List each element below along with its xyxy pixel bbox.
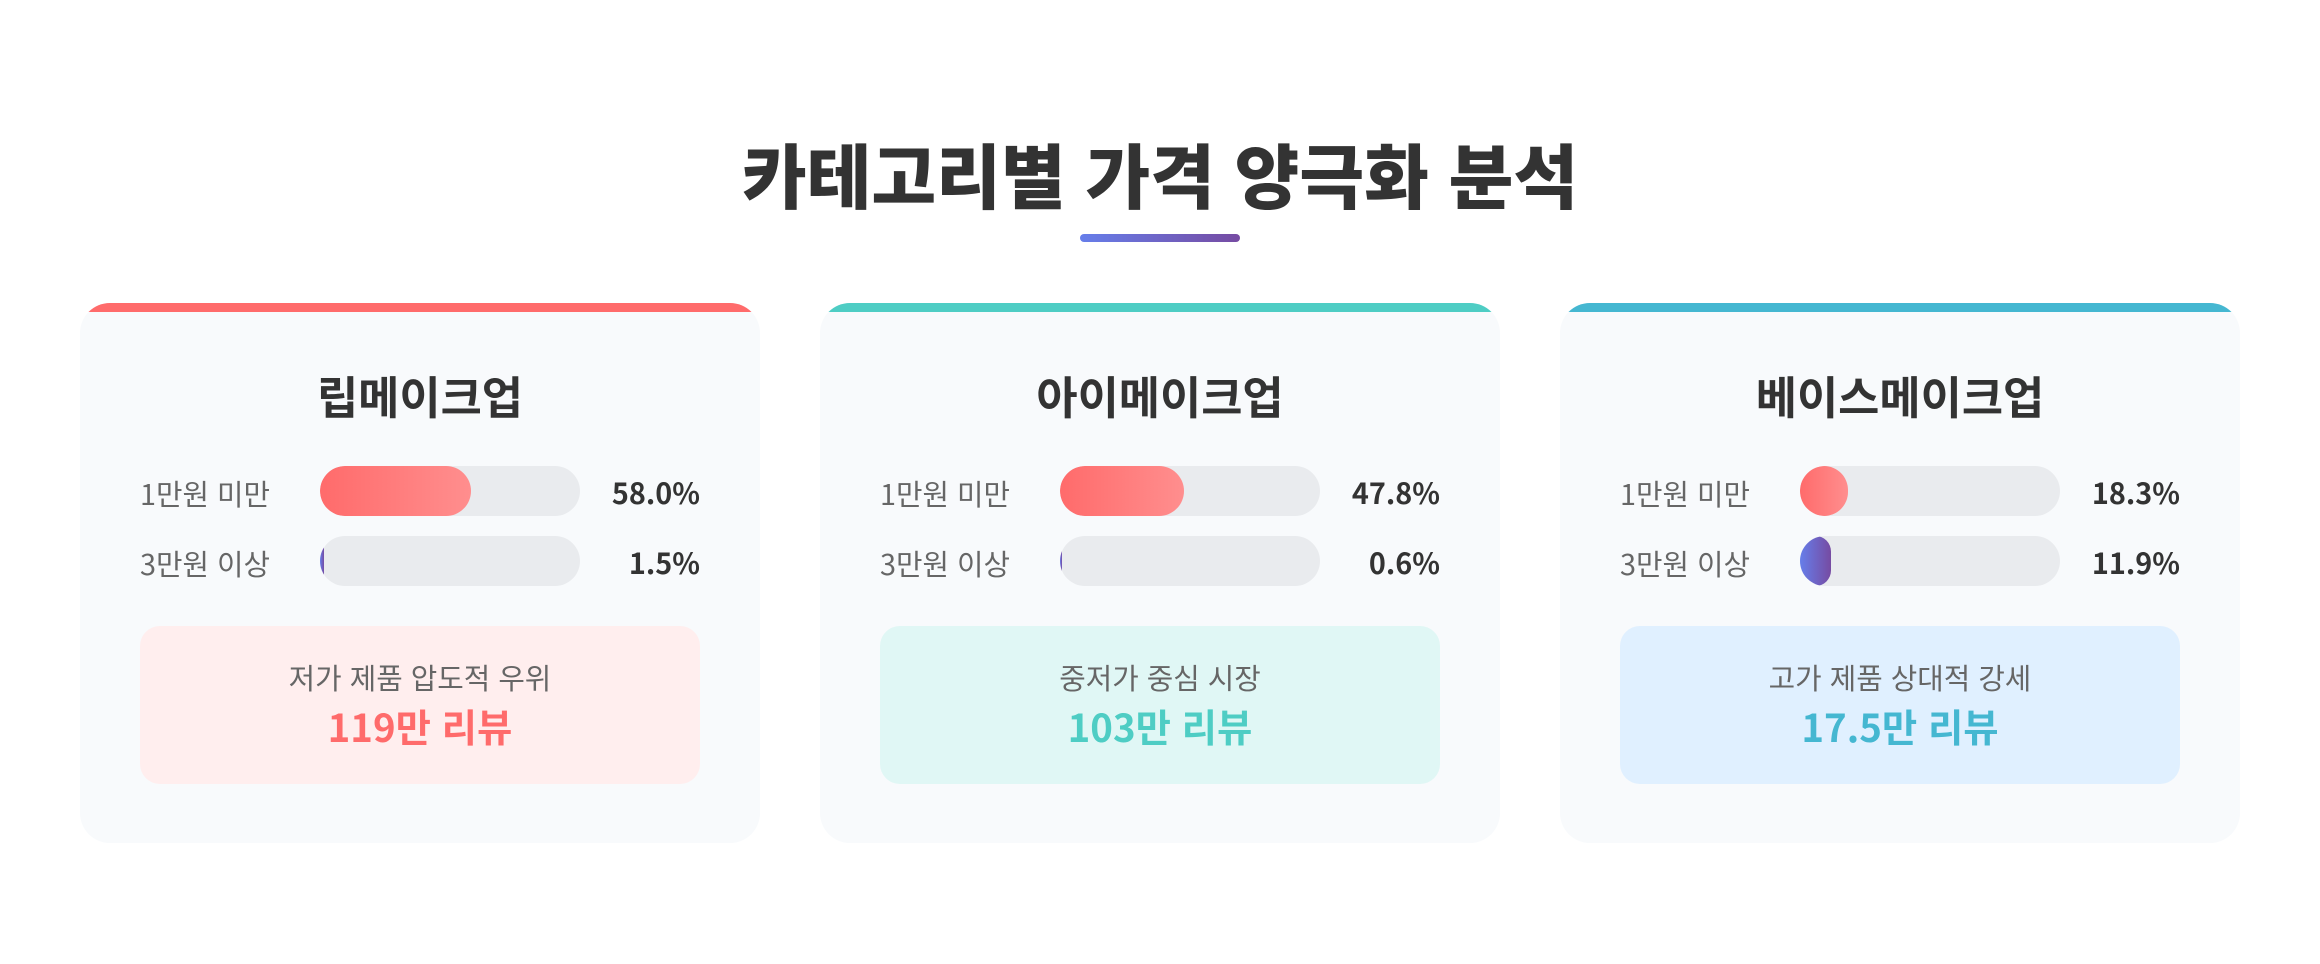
bar row: over 30k won: 3만원 이상 bbox=[1620, 543, 1750, 584]
bar row: over 30k won: 0.6% bbox=[1369, 542, 1440, 583]
accent stripe: eye makeup bbox=[820, 303, 1500, 312]
bar row: under 10k won: 1만원 미만 bbox=[1620, 473, 1750, 514]
accent stripe: lip makeup bbox=[80, 303, 760, 312]
bar row: under 10k won bbox=[1620, 466, 2180, 516]
bar row: over 30k won bbox=[1620, 536, 2180, 586]
bar row: under 10k won bbox=[140, 466, 700, 516]
bar row: under 10k won: 47.8% bbox=[1352, 472, 1440, 513]
bar row: over 30k won: 3만원 이상 bbox=[140, 543, 270, 584]
heading: lip makeup: 립메이크업 bbox=[317, 362, 523, 427]
bar row: under 10k won bbox=[880, 466, 1440, 516]
panel: base makeup bbox=[1560, 303, 2240, 843]
panel: lip makeup bbox=[80, 303, 760, 843]
bar row: over 30k won bbox=[140, 536, 700, 586]
bar row: over 30k won: 11.9% bbox=[2092, 542, 2180, 583]
heading: eye makeup: 아이메이크업 bbox=[1036, 362, 1284, 427]
panel: eye makeup bbox=[820, 303, 1500, 843]
title: 카테고리별 가격 양극화 분석 bbox=[742, 122, 1578, 224]
bar row: over 30k won bbox=[880, 536, 1440, 586]
callout: lip makeup: 저가 제품 압도적 우위 bbox=[289, 657, 551, 698]
bar row: under 10k won: 18.3% bbox=[2092, 472, 2180, 513]
callout: base makeup: 고가 제품 상대적 강세 bbox=[1769, 657, 2031, 698]
callout: eye makeup: 103만 리뷰 bbox=[1068, 698, 1252, 754]
callout: eye makeup bbox=[880, 626, 1440, 784]
accent stripe: base makeup bbox=[1560, 303, 2240, 312]
bar row: under 10k won: 58.0% bbox=[612, 472, 700, 513]
bar row: over 30k won: 3만원 이상 bbox=[880, 543, 1010, 584]
callout: lip makeup bbox=[140, 626, 700, 784]
callout: base makeup: 17.5만 리뷰 bbox=[1801, 698, 1999, 754]
callout: lip makeup: 119만 리뷰 bbox=[328, 698, 512, 754]
bar row: under 10k won: 1만원 미만 bbox=[880, 473, 1010, 514]
title underline bbox=[1080, 234, 1240, 242]
callout: eye makeup: 중저가 중심 시장 bbox=[1059, 657, 1261, 698]
bar row: under 10k won: 1만원 미만 bbox=[140, 473, 270, 514]
heading: base makeup: 베이스메이크업 bbox=[1756, 362, 2044, 427]
callout: base makeup bbox=[1620, 626, 2180, 784]
bar row: over 30k won: 1.5% bbox=[629, 542, 700, 583]
